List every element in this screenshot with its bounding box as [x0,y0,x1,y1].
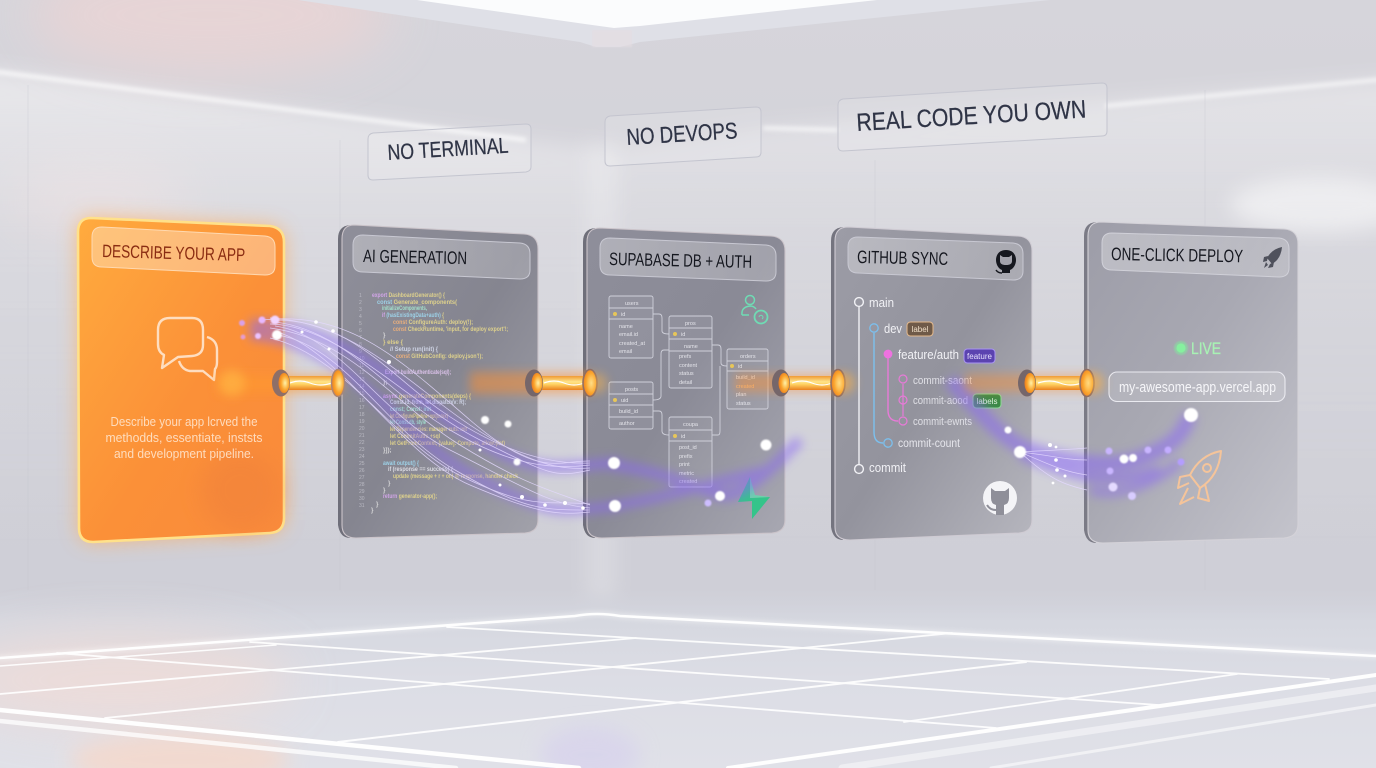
table: users: created_at [619,341,645,347]
description text: and development pipeline. [114,446,254,461]
panel: github sync [831,227,1032,540]
table: orders: build_id [736,375,755,381]
panel: ai generation [338,225,538,538]
code listing: async generateComponents(deps) { [383,393,471,400]
code listing: const CheckRuntime, 'input, for deploy export'!; [393,326,508,333]
code listing: Export buildAuthenticate(sql); [385,369,451,376]
table: coupa: metric [679,471,694,477]
icon: supabase bolt [738,477,770,519]
database schema diagram [609,296,768,487]
header: describe your app: DESCRIBE YOUR APP [102,241,245,265]
description text: methodds, essentiate, inststs [106,430,263,445]
label: real code you own: REAL CODE YOU OWN [856,95,1087,137]
line numbers: 28 [359,482,365,488]
table: posts [609,382,653,429]
code listing: let Dependencies: manager cuts: init [390,426,467,433]
code listing: update (message + r + on) @ response, handler check [393,473,518,480]
live status [1174,339,1221,358]
table: users: email.id [619,332,638,338]
line numbers: 16 [359,398,365,404]
icon: rocket header [1263,247,1282,268]
branch tree: dev [884,322,903,336]
icon: auth user [742,296,768,324]
code listing: if (hasExistingData+auth) { [382,312,444,319]
line numbers: 1 [359,293,362,299]
connector: step 4 to 5 [965,370,1104,396]
table: pros: id [681,332,685,338]
tag: feature [964,349,995,363]
code listing: const GitHubConfig: deploy.json'!); [396,353,483,360]
line numbers: 7 [359,335,362,341]
line numbers: 13 [359,377,365,383]
line numbers: 11 [359,363,364,369]
icon: chat bubbles [158,318,217,380]
url pill [1109,372,1285,402]
header: supabase db + auth: SUPABASE DB + AUTH [609,249,752,272]
code listing: } else { [383,339,404,346]
connector: step 3 to 4 [735,370,855,396]
code listing: const ConfigureAuth: deploy(!); [393,319,473,326]
branch tree: commit [869,461,906,475]
table: orders: plan [736,392,746,398]
table: coupa: prefix [679,454,693,460]
table: pros: prefs [679,354,691,360]
code listing: const Generate_components( [377,299,458,306]
table: coupa: coupa [683,422,699,428]
line numbers: 18 [359,412,365,418]
code listing: let Const.db, style [390,419,426,426]
table: orders: status [736,401,751,407]
table: users [609,296,653,358]
branch tree: commit-ewnts [913,416,972,428]
icon: github logo [983,481,1017,515]
code listing: // Setup run(init) { [390,346,439,353]
line numbers: 4 [359,314,362,320]
code listing: let GetFromContext, [value]: Compute, allow:(fnt) [390,440,505,447]
line numbers: 24 [359,454,365,460]
line numbers: 5 [359,321,362,327]
line numbers: 25 [359,461,365,467]
tag: label green: labels [977,397,997,406]
table: coupa: post_id [679,445,697,451]
line numbers: 2 [359,300,362,306]
code listing: const; Const: init [390,406,431,413]
line numbers: 9 [359,349,362,355]
line numbers: 17 [359,405,365,411]
branch tree: commit-count [898,438,961,450]
table: orders [727,349,768,409]
header: github sync: GITHUB SYNC [857,247,948,269]
label: no devops: NO DEVOPS [626,117,738,150]
code listing: } [388,480,391,487]
table: coupa: id [681,434,685,440]
label: no terminal: NO TERMINAL [387,133,509,165]
line numbers: 12 [359,370,365,376]
code listing: } [376,501,379,508]
table: users: email [619,349,632,355]
line numbers: 6 [359,328,362,334]
connector: step 2 to 3 [470,370,607,396]
panel: supabase db + auth [583,228,785,538]
label: no devops [605,107,761,166]
code listing: Const.id, from, let dispatch(v: R); [390,399,466,406]
code listing: } [383,487,386,494]
code listing: if (response == success) { [388,466,453,473]
header: ai generation: AI GENERATION [363,246,467,268]
table: posts: uid [621,398,628,404]
line numbers: 29 [359,489,365,495]
live status: LIVE [1191,339,1221,358]
line numbers: 10 [359,356,365,362]
table: orders: id [738,364,742,370]
line numbers: 19 [359,419,365,425]
table: pros: content [679,363,698,369]
header: one-click deploy: ONE-CLICK DEPLOY [1111,244,1243,266]
branch tree: commit-aood [913,395,968,407]
table: posts: build_id [619,409,638,415]
panel: describe your app [78,218,284,542]
code listing: initializeComponents, [382,305,427,312]
data streams: purple particle flows [239,316,1198,513]
line numbers: 26 [359,468,365,474]
icon: rocket outline [1178,451,1221,504]
table: pros: status [679,371,694,377]
code listing: await output() { [383,460,419,467]
line numbers: 3 [359,307,362,313]
description text [106,414,263,461]
particles [239,316,1198,512]
tag: label green [973,394,1001,408]
table: orders: created [736,384,754,390]
line numbers: 22 [359,440,365,446]
code listing: export DashboardGenerator() { [372,292,445,299]
table: pros: name [684,344,698,350]
header: describe your app [92,227,275,275]
line numbers: 23 [359,447,365,453]
header: ai generation [353,235,530,279]
table: orders: orders [740,354,756,360]
tag: label: label [912,325,929,334]
table: coupa: print [679,462,690,468]
line numbers: 14 [359,384,365,390]
table: coupa [669,417,712,487]
tag: label [907,322,933,336]
code listing [371,292,518,514]
line numbers: 27 [359,475,365,481]
code listing: }]); [383,447,392,454]
branch tree: commit-saont [913,375,972,387]
line numbers: 15 [359,391,365,397]
table: pros: pros [685,321,696,327]
branch tree [855,296,1001,475]
table: users: users [625,301,639,307]
code listing: let CommitAuth: +sql [390,433,440,440]
table: users: name [619,324,633,330]
table: posts: posts [625,387,638,393]
line numbers: 31 [359,503,365,509]
description text: Describe your app lcrved the [110,414,258,429]
table: pros [669,316,712,388]
line numbers: 20 [359,426,365,432]
code listing: let ConfigurePipeline+opt(index) [390,413,448,420]
header: github sync [848,237,1023,280]
tag: feature: feature [967,352,993,361]
header: supabase db + auth [600,238,776,281]
code listing: }; [383,379,387,386]
panel: one-click deploy [1084,222,1298,543]
table: pros: detail [679,380,692,386]
connector: step 1 to 2 [218,370,344,396]
line numbers: 8 [359,342,362,348]
url pill: my-awesome-app.vercel.app [1119,379,1276,396]
label: no terminal [368,124,531,180]
table: posts: author [619,421,635,427]
floor with glowing grid [0,590,1376,768]
line numbers: 30 [359,496,365,502]
branch tree: feature/auth [898,348,959,362]
line numbers [359,293,365,509]
line numbers: 21 [359,433,365,439]
icon: github header [996,250,1016,273]
table: users: id [621,312,625,318]
code listing: } [371,507,374,514]
label: real code you own [838,83,1107,151]
header: one-click deploy [1102,233,1289,277]
table: coupa: created [679,479,697,485]
code listing: return generator-app(); [383,493,437,500]
code listing: } [383,332,386,339]
branch tree: main [869,296,894,310]
